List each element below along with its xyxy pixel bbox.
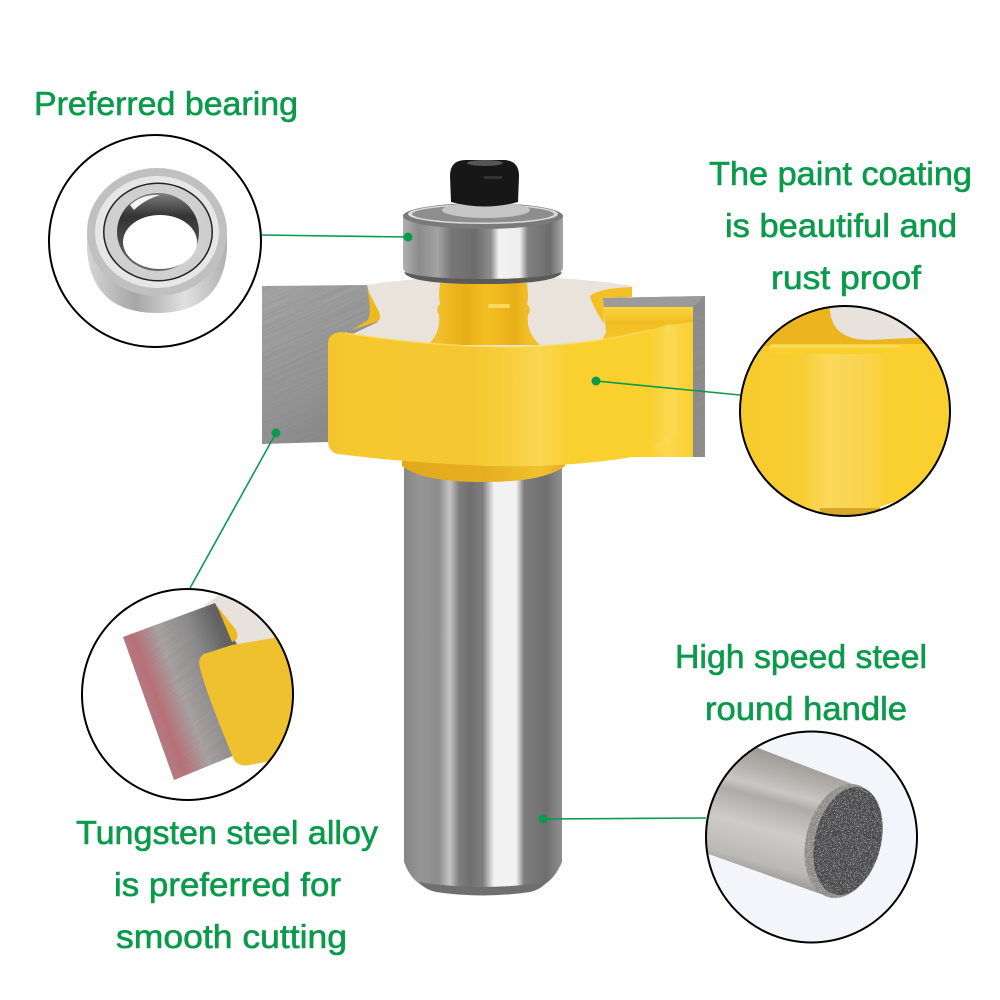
leader: tungsten tooth — [190, 428, 280, 588]
inset circle: bearing close-up — [49, 135, 261, 347]
neck highlight — [488, 304, 510, 308]
text block: paint coating: is beautiful and — [725, 207, 957, 244]
bearing top face — [403, 202, 563, 229]
steel shank — [404, 460, 562, 892]
text block: tungsten steel alloy: Tungsten steel alloy — [76, 814, 379, 851]
tooth and yellow body detail — [123, 595, 292, 780]
shank chamfer bottom — [418, 882, 547, 896]
text block: paint coating: rust proof — [771, 259, 922, 296]
body fold shading — [655, 326, 675, 447]
left carbide tooth — [262, 285, 378, 444]
leader: paint coating — [592, 376, 740, 395]
text block: high speed steel: High speed steel — [675, 638, 927, 675]
leader: steel handle — [538, 814, 706, 824]
heading: preferred bearing: Preferred bearing — [34, 85, 298, 122]
yellow front body — [328, 322, 693, 466]
inset circle: round handle close-up — [700, 730, 917, 942]
bearing icon — [87, 168, 227, 313]
inset circle: paint coating close-up — [739, 300, 950, 520]
text block: tungsten steel alloy: smooth cutting — [116, 918, 347, 955]
yellow notch left — [352, 288, 380, 330]
text block: high speed steel — [675, 638, 927, 727]
text block: tungsten steel alloy — [76, 814, 379, 955]
text block: paint coating: The paint coating — [709, 155, 972, 192]
yellow paint surface — [764, 307, 924, 515]
leader: bearing — [262, 232, 412, 242]
bearing lower edge — [404, 272, 562, 284]
cream top face of the cutter body — [340, 276, 632, 352]
text block: tungsten steel alloy: is preferred for — [114, 866, 341, 903]
yellow collar — [402, 455, 565, 482]
yellow neck under the bearing — [428, 283, 540, 345]
right yellow wing — [600, 307, 693, 457]
bearing side — [403, 215, 563, 284]
text block: paint coating — [709, 155, 972, 296]
right carbide tooth — [603, 296, 705, 457]
black socket head screw — [450, 160, 519, 206]
steel rod with ground end — [707, 748, 883, 898]
text block: high speed steel: round handle — [705, 690, 907, 727]
router bit product illustration — [262, 160, 705, 896]
body top edge highlight — [345, 330, 650, 347]
inset circle: tungsten tooth close-up — [81, 588, 294, 801]
yellow fold right of top face — [590, 287, 632, 324]
